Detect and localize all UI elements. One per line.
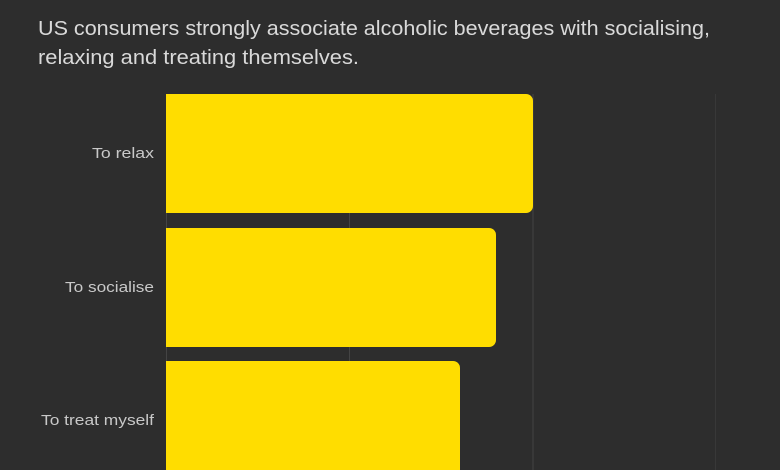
- title: [38, 17, 710, 69]
- label: To treat myself: To treat myself: [41, 412, 155, 429]
- label: To socialise: To socialise: [65, 279, 154, 296]
- bar: To relax: [166, 94, 533, 213]
- bar: To treat myself: [166, 361, 460, 470]
- title: US consumers strongly associate alcoholic beverages with socialising,: [38, 17, 710, 40]
- bar: To socialise: [166, 228, 496, 347]
- bar chart: [41, 94, 533, 470]
- label: To relax: To relax: [92, 145, 155, 162]
- title: relaxing and treating themselves.: [38, 46, 359, 69]
